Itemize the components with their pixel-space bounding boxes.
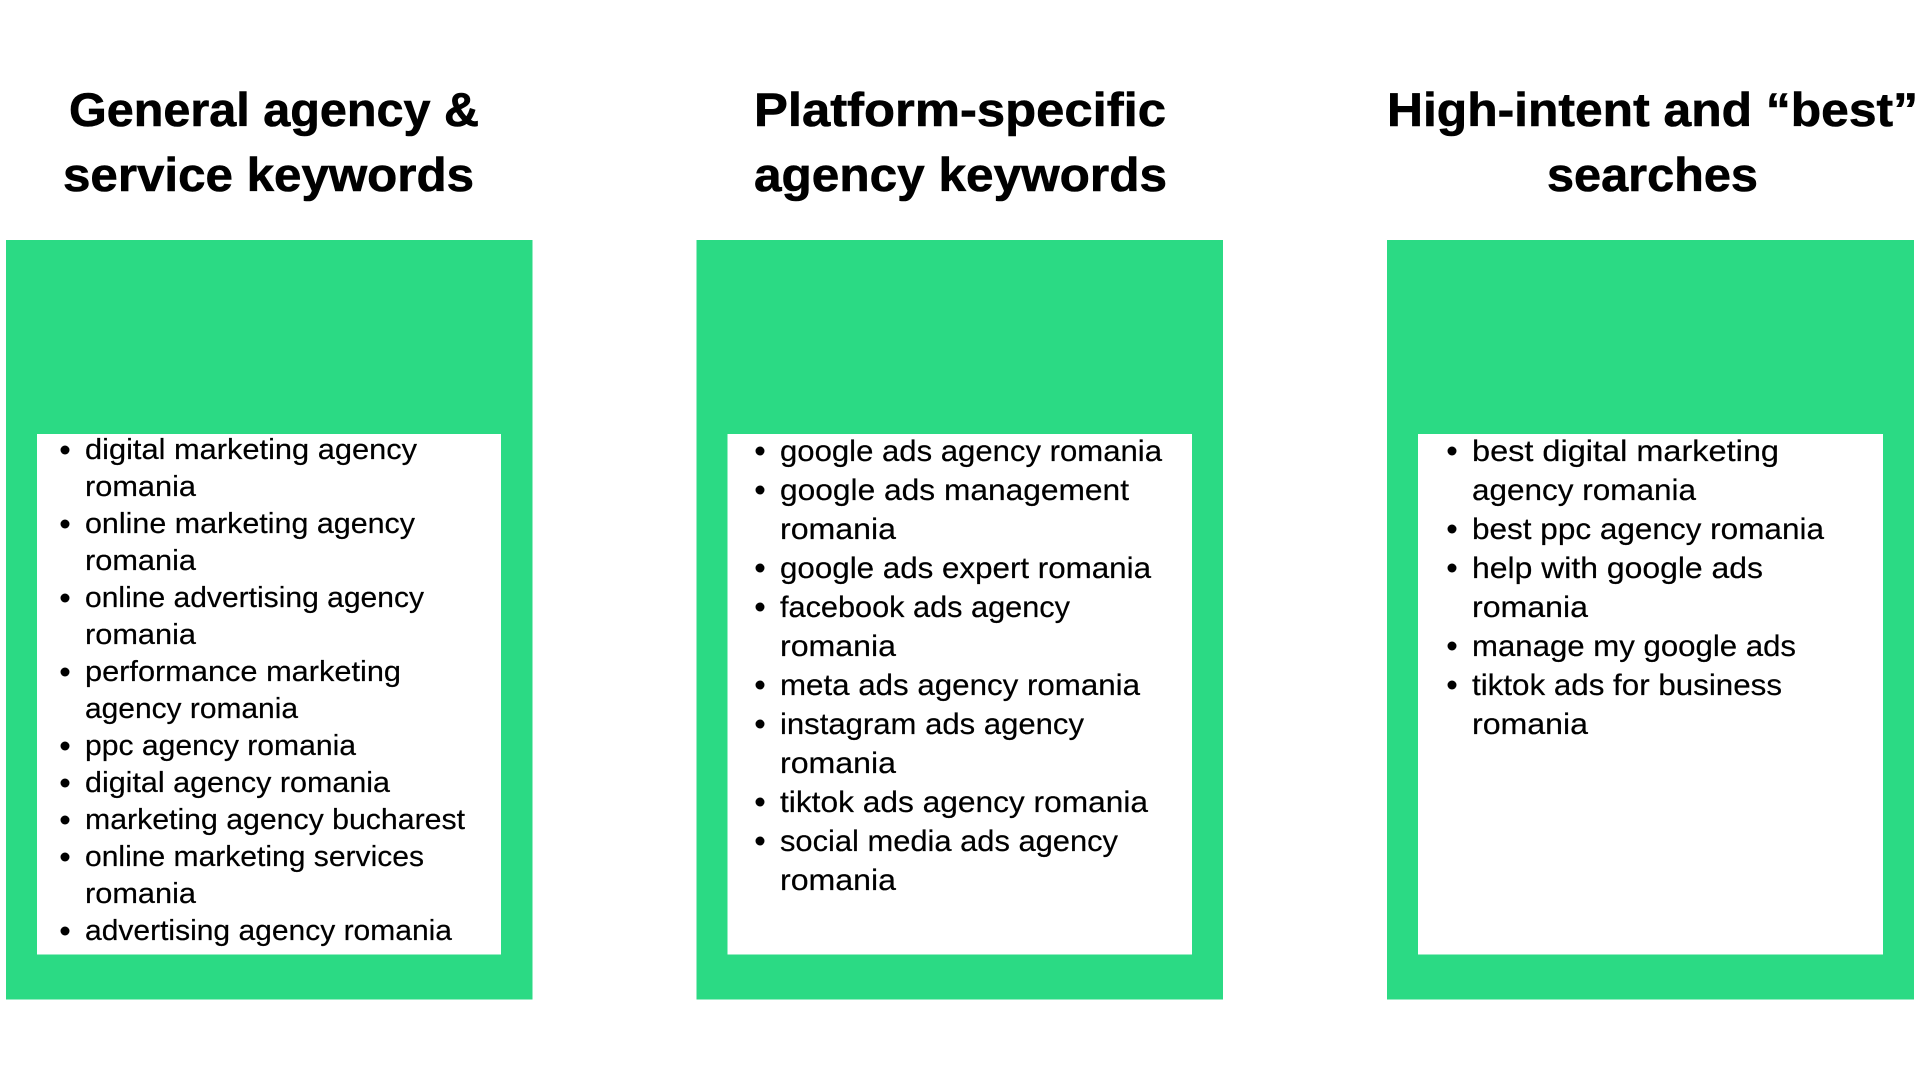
keyword list: platform: romania [780,747,896,780]
keyword list: general: digital marketing agency [85,434,418,466]
heading: high-intent: searches [1547,148,1758,201]
keyword list: platform: google ads agency romania [780,435,1162,468]
heading: general agency: General agency & [69,83,479,136]
keyword list: general: agency romania [85,693,299,725]
heading: high-intent [1387,83,1918,201]
keyword list: platform: social media ads agency [780,825,1118,858]
keyword list: platform: instagram ads agency [780,708,1084,741]
keyword list: general: romania [85,471,197,503]
heading: platform-specific: Platform-specific [754,83,1166,136]
heading: platform-specific [754,83,1167,201]
keyword list: platform: meta ads agency romania [780,669,1140,702]
keyword list: platform: romania [780,513,896,546]
keyword list: platform: facebook ads agency [780,591,1070,624]
keyword list: high-intent: romania [1472,708,1588,741]
keyword list: platform: romania [780,630,896,663]
heading: high-intent: High-intent and “best” [1387,83,1918,136]
keyword list: platform: google ads expert romania [780,552,1151,585]
keyword list: general: marketing agency bucharest [85,804,465,836]
keyword list: platform [756,435,1162,897]
white list box: high-intent [1418,434,1883,954]
keyword list: high-intent: best digital marketing [1472,435,1779,468]
keyword list: general: online marketing services [85,841,424,873]
keyword list: general: online marketing agency [85,508,416,540]
heading: general agency [63,83,479,201]
keyword list: general: advertising agency romania [85,915,453,947]
keyword list: high-intent: romania [1472,591,1588,624]
green card: high-intent [1387,240,1914,1000]
green card: platform [696,240,1223,1000]
keyword list: high-intent: help with google ads [1472,552,1763,585]
keyword list: high-intent: tiktok ads for business [1472,669,1782,702]
white list box: platform [728,434,1192,954]
keyword list: high-intent: best ppc agency romania [1472,513,1824,546]
keyword list: general: romania [85,545,197,577]
keyword list: general: online advertising agency [85,582,425,614]
keyword list: high-intent [1448,435,1824,741]
heading: general agency: service keywords [63,148,474,201]
panel: high-intent and best searches [1387,83,1918,1000]
keyword list: general: romania [85,619,197,651]
keyword list: general: romania [85,878,197,910]
heading: platform-specific: agency keywords [754,148,1167,201]
panel: general agency and service keywords [6,83,532,1000]
keyword list: general: digital agency romania [85,767,391,799]
keyword list: high-intent: manage my google ads [1472,630,1796,663]
white list box: general [37,434,501,954]
keyword list: high-intent: agency romania [1472,474,1696,507]
keyword list: general [60,434,465,947]
keyword list: platform: google ads management [780,474,1130,507]
keyword list: platform: romania [780,864,896,897]
panel: platform-specific agency keywords [696,83,1223,1000]
keyword list: platform: tiktok ads agency romania [780,786,1148,819]
green card: general [6,240,532,1000]
keyword list: general: ppc agency romania [85,730,357,762]
keyword list: general: performance marketing [85,656,401,688]
